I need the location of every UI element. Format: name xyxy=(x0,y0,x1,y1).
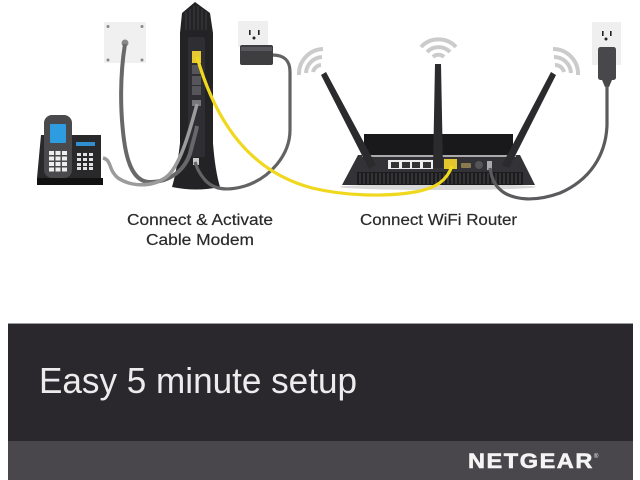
modem power adapter xyxy=(240,45,273,65)
NETGEAR logo text: NETGEAR xyxy=(468,449,594,473)
phone cable xyxy=(103,104,197,185)
telephone xyxy=(37,115,103,185)
wall outlet: modem power xyxy=(238,21,268,47)
cable modem tower xyxy=(172,2,220,190)
modem label xyxy=(127,212,273,249)
coax cable xyxy=(121,44,197,182)
router power cable xyxy=(490,86,607,199)
wifi signal: right antenna xyxy=(553,49,578,75)
router label: Connect WiFi Router xyxy=(360,212,517,229)
wifi signal: left antenna xyxy=(299,49,323,75)
brand footer bar xyxy=(8,441,633,480)
dark banner panel xyxy=(8,323,633,441)
router power plug xyxy=(598,47,616,87)
banner heading: Easy 5 minute setup xyxy=(39,360,357,401)
wifi signal: center antenna xyxy=(421,39,456,57)
registered mark: ® xyxy=(594,453,599,460)
wall outlet: router power xyxy=(592,22,621,65)
wifi router xyxy=(340,134,536,190)
modem label: Cable Modem xyxy=(146,232,254,249)
wall coax plate xyxy=(104,22,146,63)
modem power cable xyxy=(195,55,290,189)
yellow ethernet cable xyxy=(197,57,452,195)
modem label: Connect & Activate xyxy=(127,212,273,229)
router antennas xyxy=(321,64,556,169)
